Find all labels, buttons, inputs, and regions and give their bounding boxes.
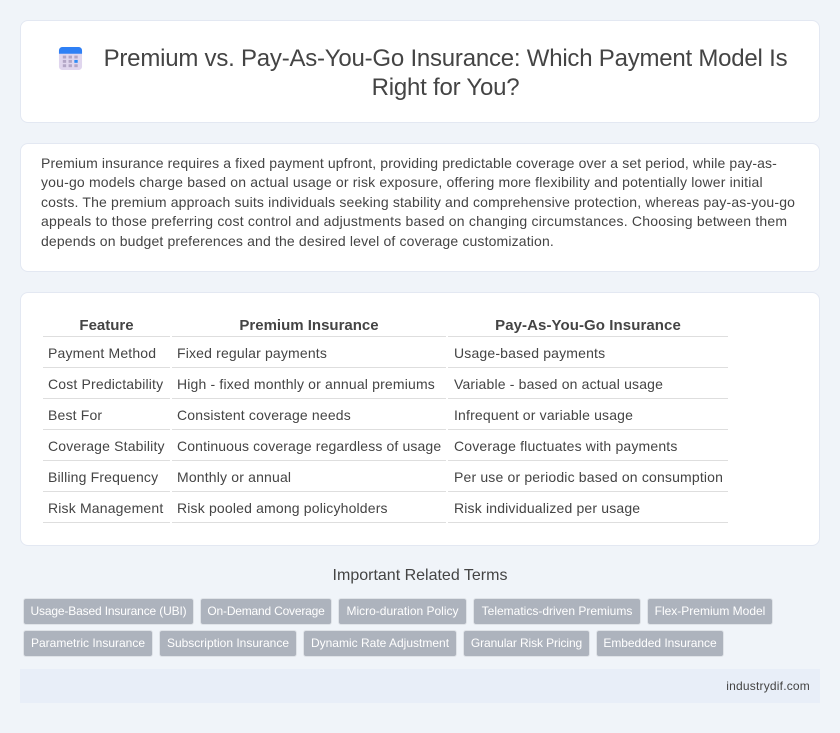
row: coverage stability: Coverage fluctuates with payments bbox=[454, 438, 678, 454]
related term chips: Subscription Insurance bbox=[167, 636, 289, 650]
row: risk management bbox=[48, 500, 640, 516]
table header: Feature bbox=[79, 317, 134, 334]
row: risk management: Risk pooled among policyholders bbox=[177, 500, 388, 516]
table header: Pay-As-You-Go Insurance bbox=[495, 317, 681, 334]
row: coverage stability: Continuous coverage regardless of usage bbox=[177, 438, 441, 454]
row: cost predictability: Cost Predictability bbox=[48, 376, 163, 392]
panel: summary text: you-go models charge based on actual usage or risk exposure, offering more flexibility and potentially lower initial bbox=[41, 174, 763, 190]
table header bbox=[79, 317, 681, 334]
title bbox=[104, 45, 787, 101]
related term chips: Parametric Insurance bbox=[31, 636, 145, 650]
row: billing frequency: Billing Frequency bbox=[48, 469, 158, 485]
panel: summary text: depends on budget preferences and the desired level of coverage customization. bbox=[41, 233, 554, 249]
related term chips: Micro-duration Policy bbox=[346, 604, 459, 618]
panel: comparison table bbox=[20, 292, 820, 546]
related term chips: On-Demand Coverage bbox=[207, 604, 325, 618]
row: best for: Consistent coverage needs bbox=[177, 407, 351, 423]
icon: calendar bbox=[58, 47, 82, 70]
table header: Premium Insurance bbox=[239, 317, 379, 334]
row: coverage stability bbox=[48, 438, 678, 454]
row: payment method: Usage-based payments bbox=[454, 345, 605, 361]
title: Premium vs. Pay-As-You-Go Insurance: Which Payment Model Is bbox=[104, 45, 787, 72]
related term chips bbox=[23, 598, 773, 657]
row: best for: Infrequent or variable usage bbox=[454, 407, 633, 423]
row: cost predictability: High - fixed monthly or annual premiums bbox=[177, 376, 435, 392]
title: Right for You? bbox=[372, 74, 519, 101]
row: payment method: Payment Method bbox=[48, 345, 156, 361]
related term chips: Dynamic Rate Adjustment bbox=[311, 636, 449, 650]
row: coverage stability: Coverage Stability bbox=[48, 438, 165, 454]
row: billing frequency bbox=[48, 469, 723, 485]
panel: header bbox=[20, 20, 820, 123]
row: payment method: Fixed regular payments bbox=[177, 345, 327, 361]
row: cost predictability bbox=[48, 376, 663, 392]
panel: summary text: appeals to those preferring cost control and adjustments based on changing circumstances. Choosing between them bbox=[41, 213, 787, 229]
related term chips: Flex-Premium Model bbox=[655, 604, 765, 618]
row: risk management: Risk individualized per usage bbox=[454, 500, 640, 516]
related term chips: Usage-Based Insurance (UBI) bbox=[30, 604, 187, 618]
row: payment method bbox=[48, 345, 605, 361]
row: risk management: Risk Management bbox=[48, 500, 163, 516]
panel: summary text bbox=[20, 143, 820, 272]
related term chips: Telematics-driven Premiums bbox=[482, 604, 632, 618]
heading: related terms: Important Related Terms bbox=[333, 567, 507, 584]
panel: summary text: Premium insurance requires a fixed payment upfront, providing predictable coverage over a set period, while pay-as- bbox=[41, 155, 777, 171]
footer source: industrydif.com bbox=[726, 679, 810, 693]
row: billing frequency: Monthly or annual bbox=[177, 469, 291, 485]
footer bbox=[20, 669, 820, 703]
row: cost predictability: Variable - based on actual usage bbox=[454, 376, 663, 392]
row: best for bbox=[48, 407, 633, 423]
related term chips: Granular Risk Pricing bbox=[471, 636, 582, 650]
related term chips: Embedded Insurance bbox=[603, 636, 717, 650]
row: best for: Best For bbox=[48, 407, 102, 423]
row: billing frequency: Per use or periodic based on consumption bbox=[454, 469, 723, 485]
panel: summary text: costs. The premium approach suits individuals seeking stability and comprehensive protection, whereas pay-as-you-go bbox=[41, 194, 795, 210]
